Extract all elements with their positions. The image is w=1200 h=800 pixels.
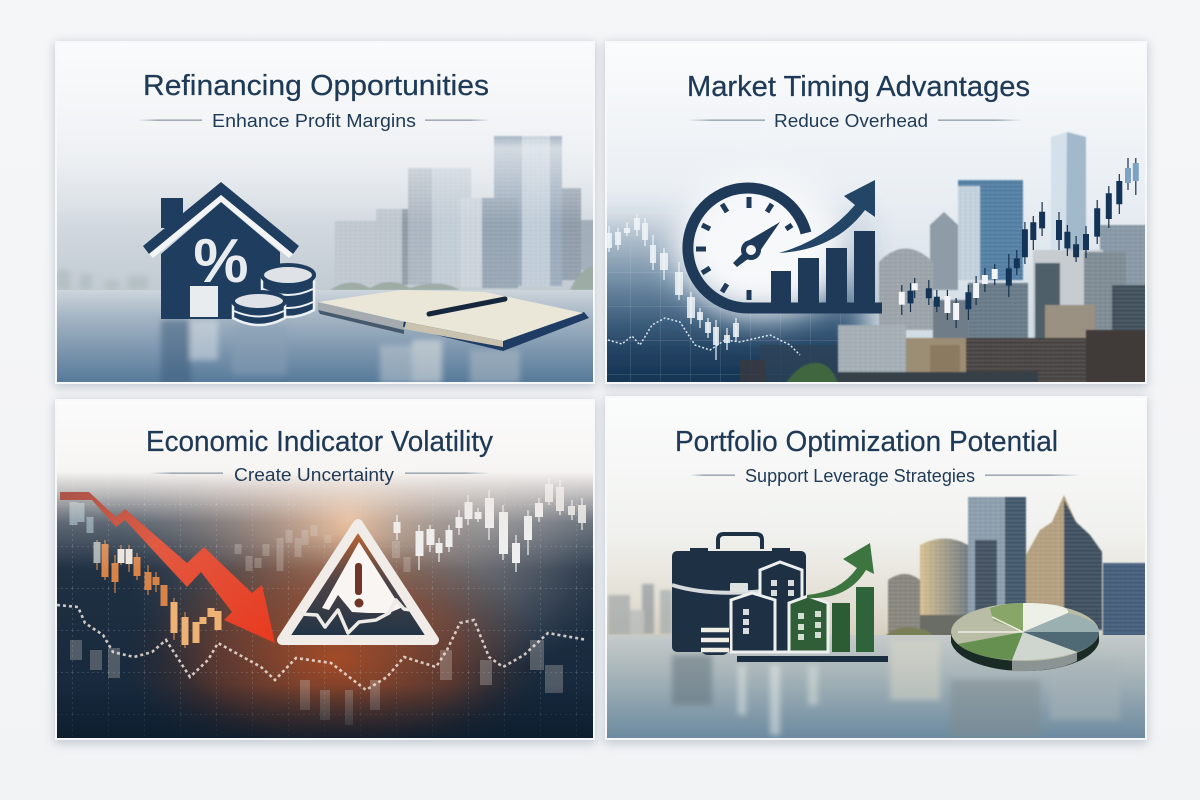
icon: warning triangle: [282, 524, 434, 640]
subtitle: Create Uncertainty: [234, 465, 394, 485]
card shadow: [604, 42, 1148, 388]
panel: market timing advantages: [600, 38, 1152, 392]
haze over skyline: [56, 125, 594, 290]
icon: house with percent: [143, 182, 299, 319]
faded candlesticks: [70, 525, 563, 725]
subtitle: Enhance Profit Margins: [212, 111, 416, 131]
city skyline: [330, 136, 594, 290]
card border: [56, 400, 594, 739]
card border: [606, 42, 1146, 383]
dotted wave line: [57, 605, 587, 690]
scene: city and water: [56, 42, 594, 383]
title: Portfolio Optimization Potential: [675, 426, 1058, 458]
line chart left: [608, 318, 800, 355]
candlesticks rising right: [394, 478, 586, 572]
card border: [606, 397, 1146, 739]
table water surface: [56, 290, 594, 383]
skyline upper: [930, 120, 1146, 383]
subtitle: Reduce Overhead: [774, 111, 928, 131]
icon: coin stacks: [233, 265, 314, 325]
scene: falling chart: [56, 400, 594, 739]
scene: skyline and water: [606, 397, 1146, 739]
bottom vignette: [56, 685, 594, 739]
icon: buildings and growth bars: [731, 543, 888, 662]
skyline: [608, 495, 1146, 637]
icon: house with percent: %: [193, 227, 249, 296]
card shadow: [54, 42, 596, 388]
panel: economic indicator volatility: [54, 400, 596, 744]
chart: 3D pie: [951, 603, 1099, 671]
arrow: falling red: [60, 492, 275, 643]
card border: [56, 42, 594, 383]
candlesticks right: [899, 158, 1139, 328]
title: Market Timing Advantages: [687, 71, 1030, 103]
title: Refinancing Opportunities: [143, 70, 489, 102]
panel: refinancing opportunities: [54, 42, 596, 388]
skyline lower: [786, 248, 1146, 383]
scene: chart and skyline: [607, 43, 1145, 382]
subtitle: Support Leverage Strategies: [745, 466, 975, 486]
icon: open notebook and pen: [318, 290, 589, 351]
panel: portfolio optimization potential: [604, 397, 1148, 744]
candlesticks falling left: [70, 502, 222, 648]
soft glow behind gauge: [674, 173, 850, 317]
card shadow: [604, 397, 1148, 744]
icon: coin stack: [700, 624, 730, 655]
title: Economic Indicator Volatility: [146, 426, 493, 458]
left dark chart area: [607, 202, 884, 382]
card shadow: [54, 400, 596, 744]
icon: gauge with rising bars: [688, 180, 882, 308]
candlesticks left: [606, 214, 739, 360]
water surface: [606, 635, 1146, 739]
icon: briefcase: [672, 534, 806, 652]
white top fade: [56, 400, 594, 570]
